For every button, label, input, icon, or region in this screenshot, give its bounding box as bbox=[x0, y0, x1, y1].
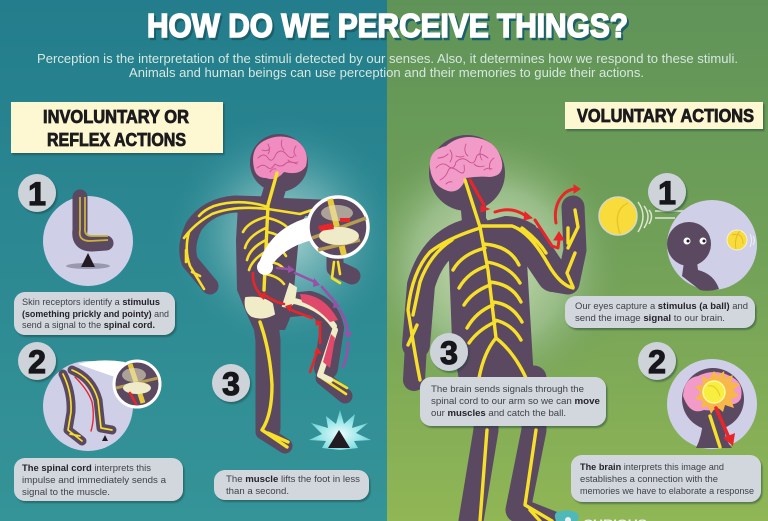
heading: involuntary or reflex actions bbox=[11, 102, 223, 153]
intro text: Animals and human beings can use perception and their memories to guide their actions. bbox=[129, 66, 644, 80]
number badge: voluntary 3 bbox=[430, 333, 468, 371]
number badge: 1: 1 bbox=[28, 176, 46, 212]
spinal nerves bbox=[184, 173, 347, 447]
title: HOW DO WE PERCEIVE THINGS? bbox=[147, 7, 628, 44]
text box: brain interprets bbox=[571, 455, 761, 502]
text box: spinal cord: The spinal cord interprets this bbox=[22, 463, 151, 473]
number badge: voluntary 3: 3 bbox=[440, 335, 458, 371]
number badge: reflex 3 bbox=[212, 364, 250, 402]
intro text bbox=[37, 52, 738, 80]
number badge: 1 bbox=[648, 173, 686, 211]
muscle bbox=[300, 294, 338, 368]
text box: muscle: The muscle lifts the foot in less bbox=[226, 474, 360, 484]
text box: spinal cord: impulse and immediately sends a bbox=[22, 475, 167, 485]
icon: stimulus burst and spike bbox=[309, 410, 371, 450]
teal glow behind figure bbox=[165, 115, 387, 355]
logo: cut-off mascot and wordmark bbox=[555, 510, 647, 521]
red signal arrows bbox=[253, 273, 323, 372]
text box: stimulus bbox=[14, 292, 175, 335]
number badge: 1 bbox=[18, 174, 56, 212]
brain bbox=[430, 137, 502, 191]
figure: voluntary body bbox=[408, 135, 580, 521]
text box: spinal cord bbox=[14, 458, 183, 501]
green glow behind figure bbox=[387, 125, 632, 410]
title: HOW DO WE PERCEIVE THINGS? bbox=[149, 10, 630, 46]
number badge: 1: 1 bbox=[658, 175, 676, 211]
figure: reflex body bbox=[184, 134, 368, 447]
body silhouette bbox=[188, 134, 352, 446]
icon: tennis ball bbox=[599, 197, 684, 235]
number badge: reflex 3: 3 bbox=[222, 366, 240, 402]
zoom callout: spinal cord bbox=[78, 360, 160, 407]
text box: move muscles bbox=[420, 377, 606, 426]
nerves bbox=[408, 180, 578, 521]
step 1 voluntary bbox=[565, 173, 757, 328]
text box: brain interprets: memories we have to elaborate a response bbox=[580, 486, 754, 496]
red signal arrows bbox=[470, 180, 580, 248]
text box: stimulus: send a signal to the spinal cord. bbox=[22, 320, 155, 330]
text box: eyes capture: Our eyes capture a stimulus (a ball) and bbox=[575, 301, 748, 311]
heading: voluntary actions: VOLUNTARY ACTIONS bbox=[577, 106, 754, 126]
text box: stimulus: (something prickly and pointy) and bbox=[22, 309, 169, 319]
icon: head watching ball bbox=[667, 222, 754, 291]
icon: foot on spike bbox=[66, 197, 110, 269]
purple signal arrows bbox=[277, 265, 352, 367]
number badge: 2 bbox=[638, 342, 676, 380]
number badge: 2 bbox=[18, 342, 56, 380]
brain bbox=[253, 136, 307, 179]
number badge: 2: 2 bbox=[28, 344, 46, 380]
text box: muscle bbox=[214, 470, 369, 500]
text box: move muscles: The brain sends signals through the bbox=[431, 384, 584, 394]
zoom callout: spinal cord detail bbox=[257, 197, 368, 275]
text box: spinal cord: signal to the muscle. bbox=[22, 487, 110, 497]
body silhouette bbox=[414, 135, 575, 521]
text box: move muscles: spinal cord to our arm so we can move bbox=[431, 396, 600, 406]
intro text: Perception is the interpretation of the stimuli detected by our senses. Also, it determines how we respond to these stimuli. bbox=[37, 52, 738, 66]
text box: stimulus: Skin receptors identify a stimulus bbox=[22, 297, 160, 307]
panel: teal background bbox=[0, 0, 387, 521]
heading: involuntary or reflex actions: REFLEX ACTIONS bbox=[47, 130, 186, 150]
panel: green background bbox=[387, 0, 768, 521]
icon: legs with signal bbox=[63, 370, 112, 441]
step 2 voluntary bbox=[571, 342, 761, 502]
heading: involuntary or reflex actions: INVOLUNTARY OR bbox=[43, 107, 189, 127]
step 1 reflex bbox=[14, 174, 175, 335]
text box: move muscles: our muscles and catch the ball. bbox=[431, 408, 566, 418]
text box: eyes capture bbox=[565, 296, 755, 328]
number badge: 2: 2 bbox=[648, 344, 666, 380]
text box: brain interprets: establishes a connection with the bbox=[580, 474, 718, 484]
skeleton: pelvis and leg bones bbox=[246, 284, 335, 380]
heading: voluntary actions bbox=[565, 102, 763, 129]
step 2 reflex bbox=[14, 342, 183, 501]
text box: eyes capture: send the image signal to our brain. bbox=[575, 313, 725, 323]
text box: brain interprets: The brain interprets this image and bbox=[580, 462, 724, 472]
icon: brain lighting up bbox=[682, 368, 744, 448]
text box: muscle: than a second. bbox=[226, 486, 289, 496]
